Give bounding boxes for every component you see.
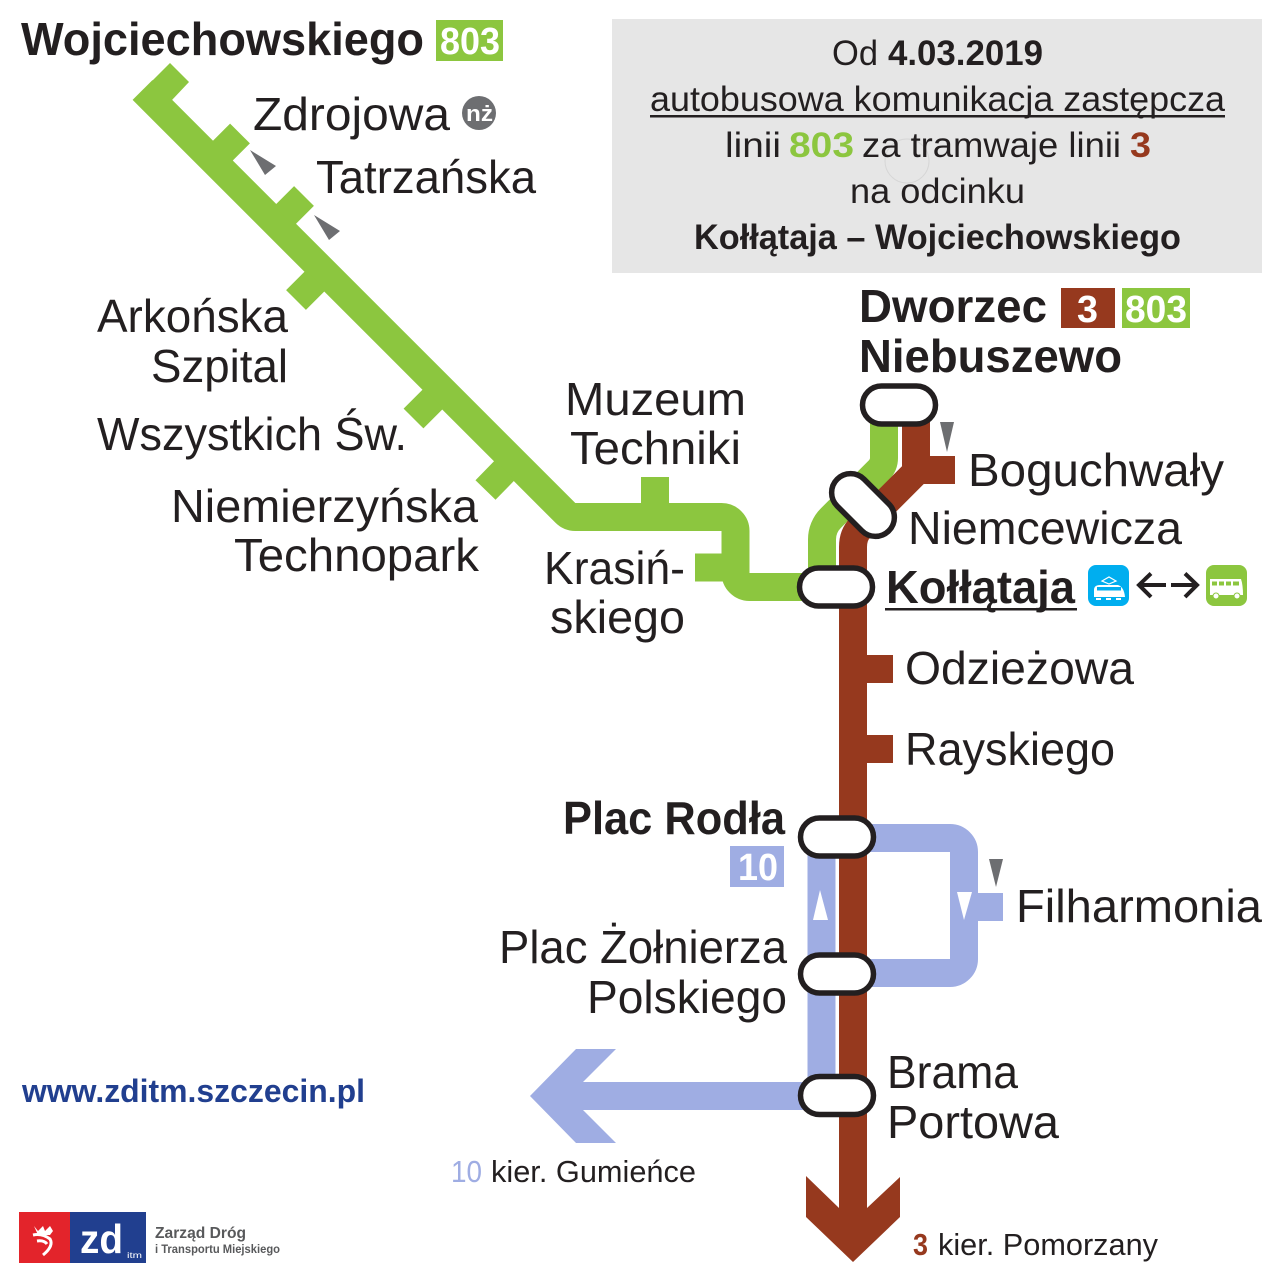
website link: www.zditm.szczecin.pl (21, 1073, 365, 1109)
icon: tram (1088, 565, 1129, 606)
stop: Plac Rodła (563, 792, 785, 889)
stop: Plac Żołnierza Polskiego: Polskiego (587, 971, 787, 1023)
icon: bus (1206, 565, 1247, 606)
notice panel: linii (725, 126, 781, 165)
terminus: Dworzec Niebuszewo: 3 (1077, 289, 1098, 331)
notice panel: 803 (789, 126, 854, 165)
logo: ZDiTM: i Transportu Miejskiego (155, 1244, 280, 1256)
direction label: line 10: kier. Gumieńce (491, 1154, 696, 1189)
notice panel (612, 19, 1262, 273)
logo: ZDiTM: itm (127, 1251, 142, 1260)
stop: Wszystkich Św.: Wszystkich Św. (97, 408, 407, 460)
stop: Niemierzyńska Technopark: Technopark (234, 529, 480, 581)
notice panel: Kołłątaja – Wojciechowskiego (694, 218, 1181, 257)
notice panel: na odcinku (850, 172, 1025, 211)
stop: Brama Portowa: Portowa (887, 1096, 1059, 1148)
direction label: line 10: 10 (451, 1154, 482, 1189)
stop: Krasińskiego: Krasiń- (544, 542, 685, 594)
notice panel: autobusowa komunikacja zastępcza (650, 80, 1226, 119)
terminus: Dworzec Niebuszewo: Dworzec (859, 280, 1047, 332)
notice panel: Od (832, 34, 878, 73)
logo: ZDiTM: Zarząd Dróg (155, 1225, 246, 1242)
stop: Zdrojowa: Zdrojowa (253, 88, 450, 140)
direction label: line 3: 3 (913, 1227, 928, 1262)
notice panel: 4.03.2019 (888, 34, 1043, 73)
stop: Brama Portowa (887, 1046, 1059, 1148)
stop: Muzeum Techniki (565, 373, 746, 474)
terminus: Dworzec Niebuszewo: 803 (1125, 289, 1187, 331)
arrow: transfer between tram and bus (1139, 574, 1197, 597)
stop: Kołłątaja: Kołłątaja (886, 561, 1075, 613)
stop: Plac Rodła: 10 (738, 847, 778, 889)
notice panel: za tramwaje linii (862, 126, 1121, 165)
stop: Niemcewicza: Niemcewicza (908, 502, 1182, 554)
stop: Brama Portowa: Brama (887, 1046, 1018, 1098)
stop: Krasińskiego: skiego (550, 591, 685, 643)
terminus: Dworzec Niebuszewo (859, 280, 1190, 382)
line 10 route (blue) (530, 838, 1003, 1143)
stop: Niemierzyńska Technopark: Niemierzyńska (171, 480, 478, 532)
logo: ZDiTM: zd (80, 1216, 123, 1262)
stop: Arkońska Szpital: Arkońska (97, 290, 288, 342)
stop: Plac Żołnierza Polskiego (499, 921, 787, 1023)
interchange stops (800, 386, 936, 1114)
stop: Arkońska Szpital: Szpital (151, 340, 288, 392)
terminus: Wojciechowskiego: Wojciechowskiego (21, 13, 424, 65)
line 803 route (green) (133, 63, 884, 590)
stop: Zdrojowa: nż (466, 101, 493, 126)
direction label: line 3: kier. Pomorzany (938, 1227, 1158, 1262)
line 3 route (brown) (806, 420, 955, 1262)
notice panel: 3 (1130, 126, 1151, 165)
direction markers (250, 150, 1003, 920)
stop: Plac Rodła: Plac Rodła (563, 792, 785, 844)
stop: Odzieżowa: Odzieżowa (905, 642, 1134, 694)
stop: Tatrzańska: Tatrzańska (316, 151, 536, 203)
stop: Krasińskiego (544, 542, 685, 643)
terminus: Dworzec Niebuszewo: Niebuszewo (859, 330, 1122, 382)
terminus: Wojciechowskiego: 803 (440, 21, 500, 63)
stop: Boguchwały: Boguchwały (968, 444, 1224, 496)
stop: Muzeum Techniki: Muzeum (565, 373, 746, 425)
stop: Plac Żołnierza Polskiego: Plac Żołnierza (499, 921, 787, 973)
logo: ZDiTM (19, 1212, 280, 1263)
stop: Arkońska Szpital (97, 290, 288, 392)
stop: Rayskiego: Rayskiego (905, 723, 1115, 775)
stop: Filharmonia: Filharmonia (1016, 880, 1262, 932)
stop: Muzeum Techniki: Techniki (570, 422, 741, 474)
stop: Niemierzyńska Technopark (171, 480, 480, 581)
